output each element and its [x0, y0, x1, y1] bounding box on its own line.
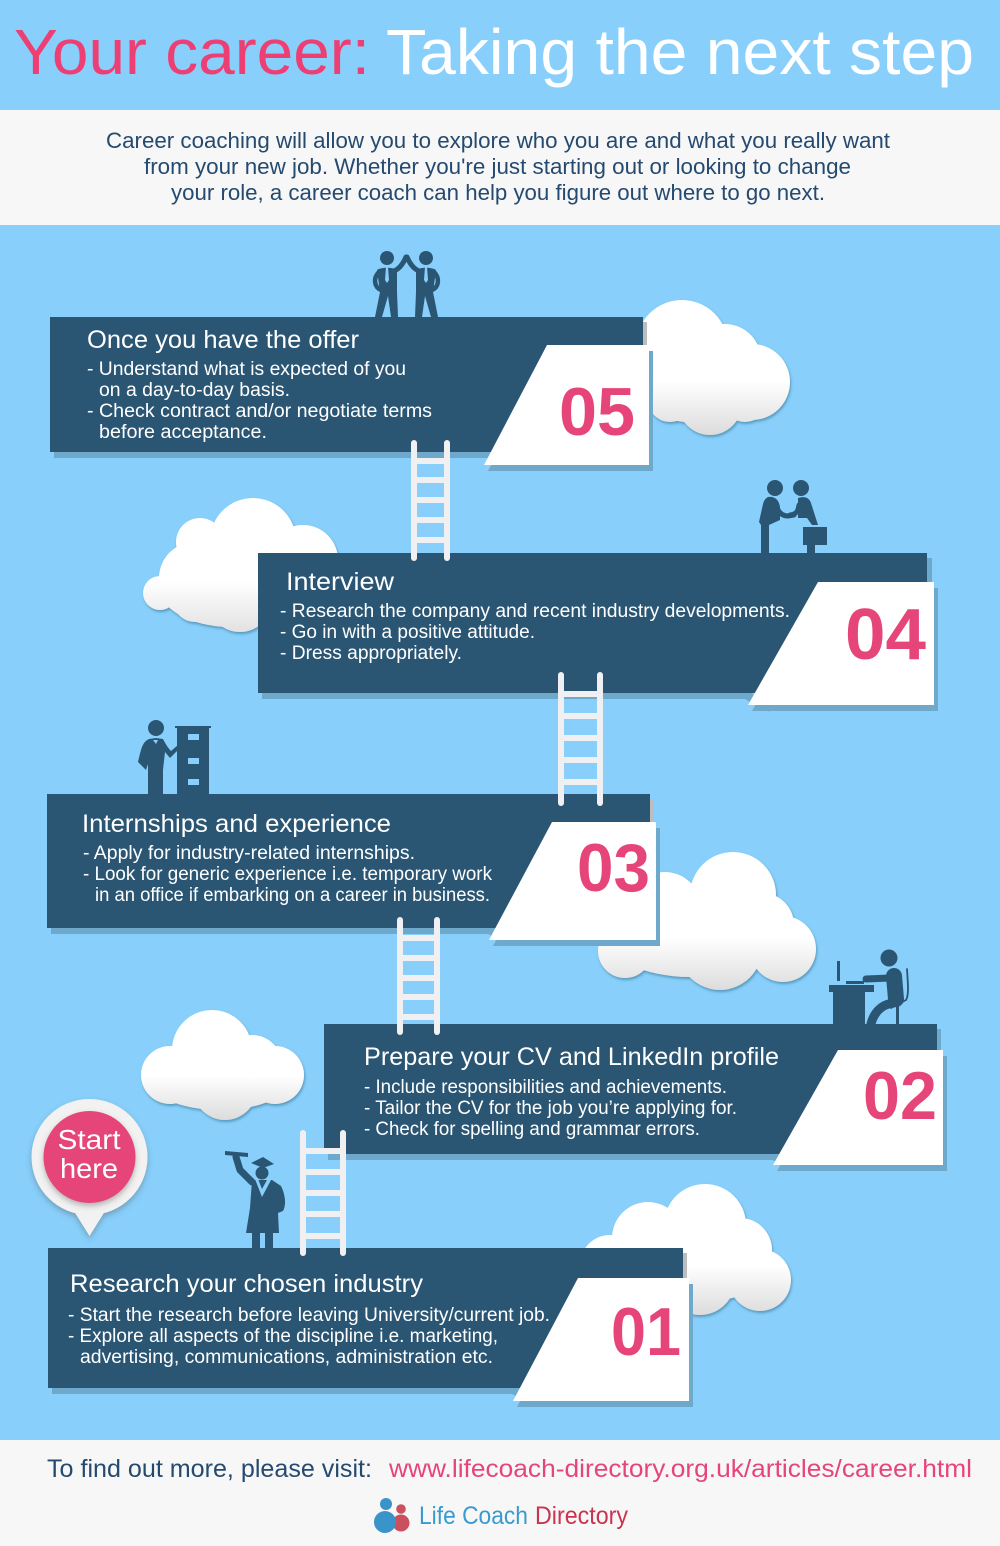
- text: step 02 details: - Check for spelling and grammar errors.: [364, 1119, 700, 1140]
- text: step 02 details: - Include responsibilities and achievements.: [364, 1077, 727, 1098]
- text: step 01 details: - Start the research before leaving University/current job.: [68, 1305, 550, 1326]
- logo: Life Coach Directory: Life Coach: [419, 1502, 528, 1530]
- cloud: left of interview: [143, 498, 338, 632]
- heading: step 05: Once you have the offer: [87, 326, 359, 354]
- text: step 02 details: - Tailor the CV for the job you’re applying for.: [364, 1098, 737, 1119]
- intro text band: [0, 110, 1000, 225]
- panel: step 03 internships: [47, 794, 660, 946]
- number 04: 04: [845, 595, 926, 675]
- callout: start here pin: here: [60, 1153, 118, 1184]
- icon: handshake with briefcase: [759, 480, 827, 553]
- text: step 04 details: [280, 601, 790, 664]
- text: step 05 details: before acceptance.: [99, 422, 267, 443]
- title: [14, 16, 974, 88]
- heading: step 03: Internships and experience: [82, 810, 391, 838]
- panel: step 05 offer: [50, 317, 653, 471]
- number 02: 02: [863, 1058, 937, 1134]
- callout: start here pin: [32, 1099, 148, 1236]
- ladder: 04 to 03: [558, 672, 603, 806]
- heading: step 04: Interview: [286, 568, 395, 596]
- title: Your career:: [14, 16, 370, 88]
- text: step 05 details: [87, 359, 432, 443]
- text: step 04 details: - Go in with a positive attitude.: [280, 622, 535, 643]
- footer text: visit prompt: To find out more, please visit:: [47, 1455, 372, 1483]
- text: step 01 details: - Explore all aspects of the discipline i.e. marketing,: [68, 1326, 498, 1347]
- icon: person at desk: [829, 950, 908, 1024]
- text: step 05 details: - Understand what is expected of you: [87, 359, 406, 380]
- ladder: 05 to 04: [411, 440, 450, 561]
- cloud: top right: [630, 300, 790, 435]
- text: step 03 details: [83, 843, 492, 906]
- text: step 03 details: - Apply for industry-related internships.: [83, 843, 415, 864]
- text: step 03 details: - Look for generic experience i.e. temporary work: [83, 864, 492, 885]
- title: Taking the next step: [386, 16, 974, 88]
- number 05: 05: [559, 374, 635, 450]
- ladder: 03 to 02: [397, 917, 440, 1035]
- text: step 04 details: - Research the company and recent industry developments.: [280, 601, 790, 622]
- footer link: www.lifecoach-directory.org.uk/articles/career.html: [388, 1455, 972, 1483]
- text: step 01 details: advertising, communications, administration etc.: [80, 1347, 493, 1368]
- intro text band: your role, a career coach can help you figure out where to go next.: [171, 180, 825, 205]
- ladder: 02 to 01: [300, 1130, 346, 1256]
- text: step 03 details: in an office if embarking on a career in business.: [95, 885, 490, 906]
- cloud: middle left: [141, 1010, 304, 1120]
- text: step 05 details: - Check contract and/or negotiate terms: [87, 401, 432, 422]
- footer band: [0, 1440, 1000, 1546]
- heading: step 01: Research your chosen industry: [70, 1270, 424, 1298]
- cloud: right of internships: [598, 852, 816, 990]
- intro text band: Career coaching will allow you to explore who you are and what you really want: [106, 128, 890, 153]
- panel: step 01 research: [48, 1248, 693, 1407]
- cloud: bottom right: [580, 1184, 791, 1315]
- icon: two businessmen high five: [375, 251, 438, 317]
- icon: man beside filing cabinet: [138, 720, 211, 794]
- panel: step 04 interview: [258, 553, 938, 712]
- logo: Life Coach Directory: [374, 1498, 628, 1533]
- text: step 02 details: [364, 1077, 737, 1140]
- number 01: 01: [611, 1294, 681, 1370]
- text: step 05 details: on a day-to-day basis.: [99, 380, 290, 401]
- callout: start here pin: Start: [58, 1124, 121, 1155]
- icon: graduate raising diploma: [225, 1151, 285, 1248]
- logo: Life Coach Directory: Directory: [535, 1502, 628, 1530]
- intro text band: from your new job. Whether you're just starting out or looking to change: [144, 154, 851, 179]
- text: step 01 details: [68, 1305, 550, 1368]
- number 03: 03: [577, 830, 650, 906]
- panel: step 02 CV: [324, 1024, 947, 1171]
- heading: step 02: Prepare your CV and LinkedIn profile: [364, 1043, 779, 1071]
- text: step 04 details: - Dress appropriately.: [280, 643, 462, 664]
